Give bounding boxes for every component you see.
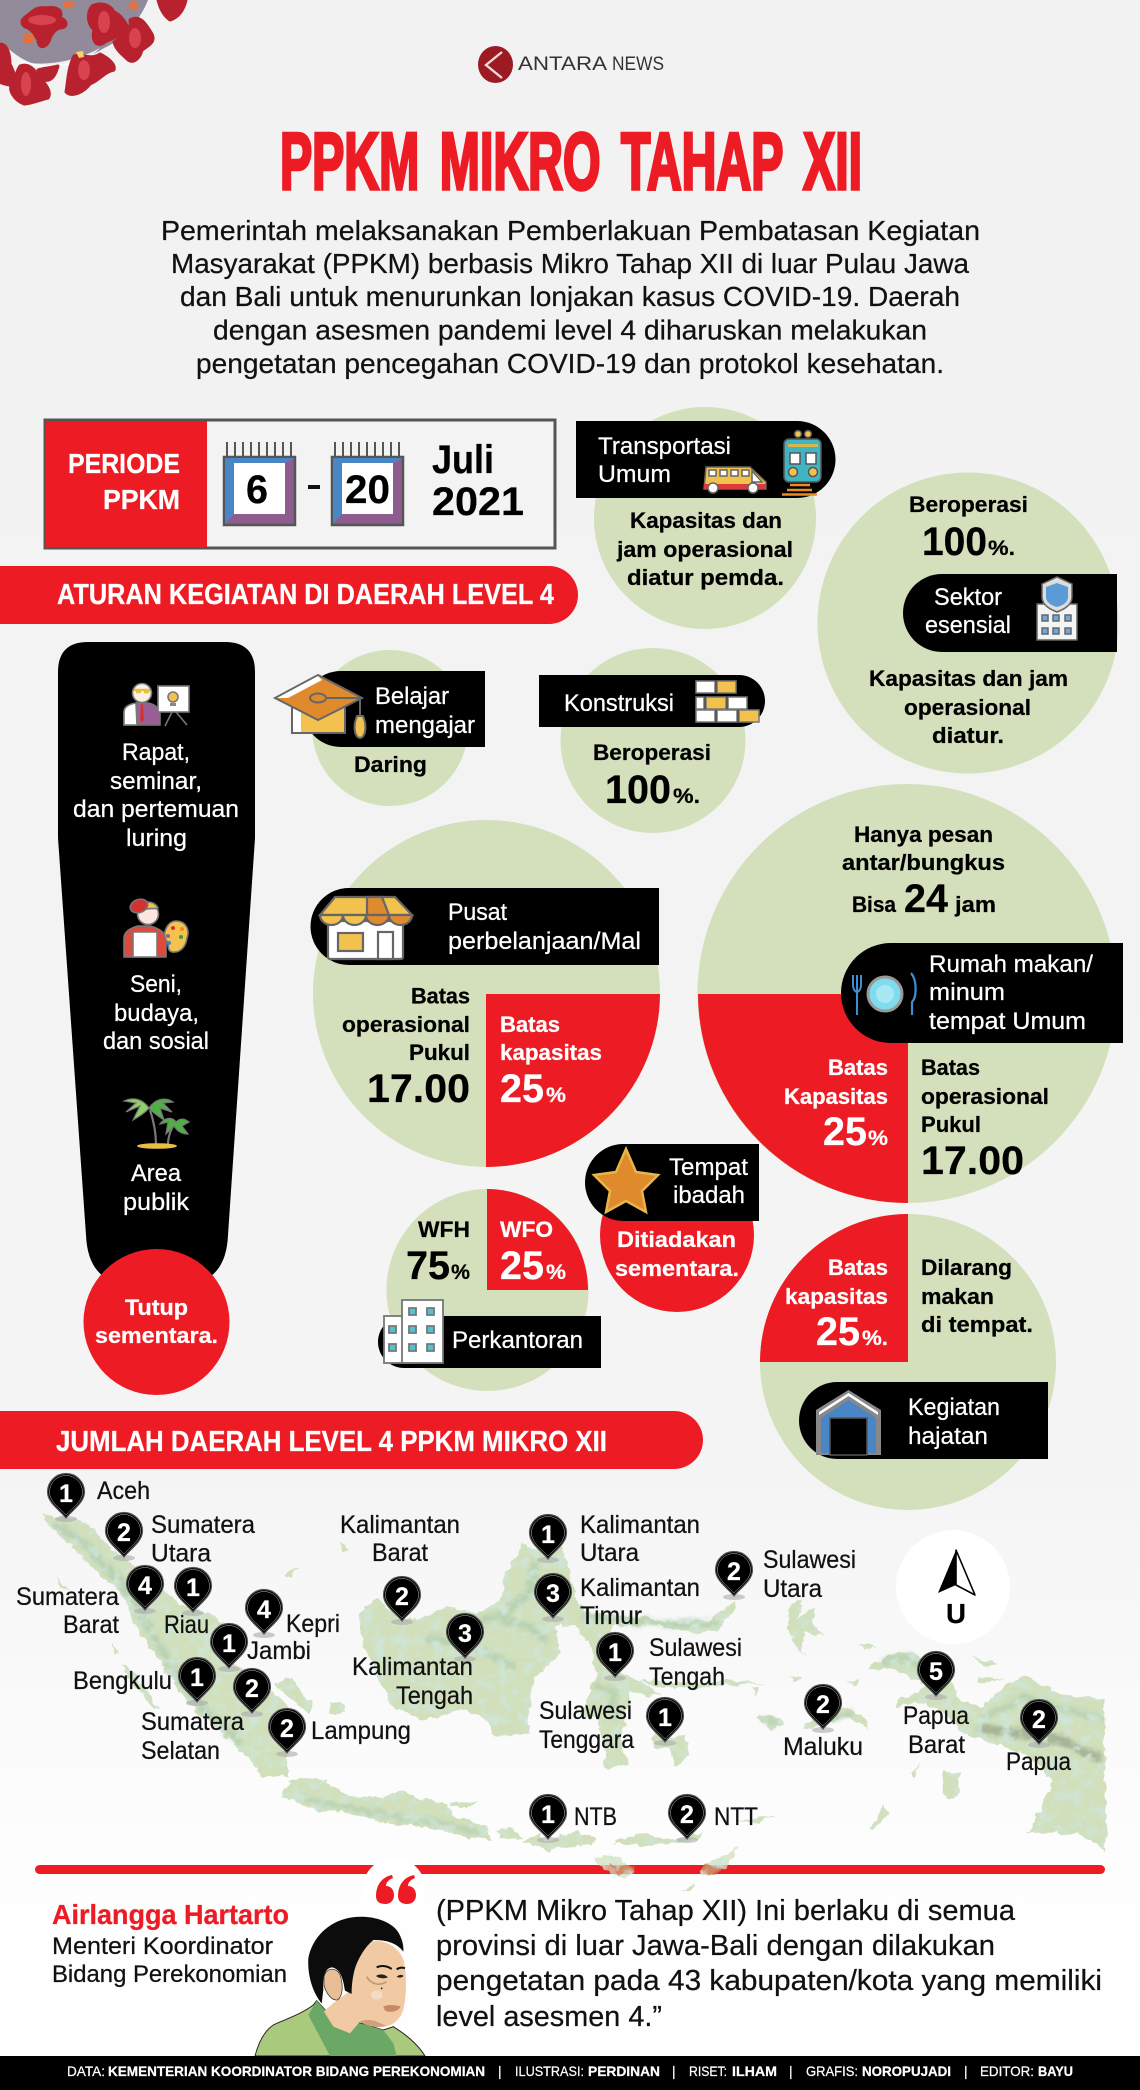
panel: sektor esensial: diatur.	[932, 723, 1004, 748]
footer: |	[789, 2063, 793, 2079]
map: east Indonesia	[560, 1600, 1106, 1892]
panel: rumah makan: 24	[904, 877, 949, 921]
pin: Kalimantan Utara: Kalimantan	[580, 1511, 700, 1539]
pin: Sulawesi Utara: Utara	[763, 1575, 822, 1603]
compass: U	[946, 1598, 966, 1629]
logo: Antara News	[478, 46, 664, 83]
icon: store	[320, 897, 412, 959]
panel: konstruksi: Konstruksi	[564, 690, 674, 717]
pin: Lampung: Lampung	[311, 1717, 411, 1745]
panel: rumah makan: Rumah makan/	[929, 951, 1093, 978]
panel: transportasi umum: diatur pemda.	[627, 565, 784, 590]
panel: pusat perbelanjaan	[310, 820, 660, 1167]
pin: Jambi: 1	[222, 1630, 236, 1658]
panel: pusat perbelanjaan: 25	[500, 1067, 544, 1111]
footer: NOROPUJADI	[862, 2063, 951, 2079]
map: Indonesia	[43, 1515, 1106, 1892]
divider line	[35, 1865, 1105, 1874]
panel: sektor esensial: Beroperasi	[909, 492, 1028, 517]
pin: Sumatera Utara: Sumatera	[151, 1511, 255, 1539]
text: rapat	[73, 739, 239, 852]
pin: NTT	[668, 1794, 758, 1843]
panel: sektor esensial: esensial	[925, 612, 1011, 639]
pin: Kalimantan Barat	[340, 1511, 460, 1625]
panel: belajar mengajar: Belajar	[375, 683, 449, 710]
panel: rumah makan: minum	[929, 979, 1005, 1006]
banner: aturan kegiatan: ATURAN KEGIATAN DI DAERAH LEVEL 4	[57, 579, 554, 611]
icon: house	[816, 1390, 881, 1455]
pin: Riau: 1	[186, 1574, 200, 1602]
panel: tempat ibadah: Tempat	[669, 1154, 748, 1181]
footer: DATA:	[67, 2063, 105, 2079]
pin: Sumatera Selatan: Selatan	[141, 1737, 220, 1765]
pin: Riau: Riau	[164, 1611, 209, 1639]
pin: Maluku: Maluku	[783, 1733, 863, 1761]
speaker name and role: Menteri Koordinator	[52, 1933, 273, 1960]
panel: pusat perbelanjaan: 17.00	[367, 1067, 470, 1111]
panel: kegiatan hajatan: hajatan	[908, 1423, 988, 1450]
panel: kegiatan hajatan: di tempat.	[921, 1312, 1033, 1337]
pin: Kalimantan Timur: 3	[546, 1580, 560, 1608]
pin: Sumatera Utara: 2	[117, 1519, 131, 1547]
pin: Papua Barat: 5	[929, 1658, 943, 1686]
logo: Antara News: ANTARA	[518, 54, 607, 75]
panel: rumah makan: Hanya pesan	[854, 822, 993, 847]
panel: sektor esensial: 100	[922, 520, 987, 564]
pin: Sumatera Barat: Barat	[63, 1611, 119, 1639]
pin: Kalimantan Timur: Timur	[580, 1602, 642, 1630]
panel: belajar mengajar	[275, 650, 485, 806]
panel: belajar mengajar: mengajar	[375, 712, 475, 739]
panel: pusat perbelanjaan: perbelanjaan/Mal	[448, 928, 641, 955]
icon: palm trees	[124, 1099, 189, 1149]
speaker name and role: Bidang Perekonomian	[52, 1961, 287, 1988]
logo: Antara News: NEWS	[612, 54, 664, 75]
footer: |	[964, 2063, 968, 2079]
quote text: (PPKM Mikro Tahap XII) Ini berlaku di semua	[436, 1895, 1016, 1927]
panel: periode PPKM: 2021	[432, 480, 524, 524]
pin: NTT: NTT	[714, 1803, 758, 1831]
pin: Kalimantan Tengah	[352, 1614, 484, 1710]
panel: perkantoran: 75	[406, 1244, 450, 1288]
panel: rumah makan: Pukul	[921, 1112, 981, 1137]
panel: kegiatan hajatan: Kegiatan	[908, 1394, 1000, 1421]
panel: tempat ibadah	[585, 1144, 759, 1312]
quote text: level asesmen 4.”	[436, 2001, 662, 2033]
panel: perkantoran: WFH	[418, 1217, 470, 1242]
panel: rumah makan: 25	[823, 1110, 867, 1154]
panel: rumah makan: Batas	[828, 1055, 888, 1080]
panel: rumah makan	[698, 784, 1123, 1203]
intro text: dan Bali untuk menurunkan lonjakan kasus COVID-19. Daerah	[180, 281, 960, 312]
panel: periode PPKM: PERIODE	[68, 448, 180, 479]
panel: transportasi umum: Umum	[598, 461, 671, 488]
panel: kegiatan tutup sementara: dan sosial	[103, 1028, 209, 1055]
pin: Sumatera Barat: 4	[138, 1572, 152, 1600]
pin: Kalimantan Tengah: Tengah	[396, 1682, 473, 1710]
panel: rumah makan: Bisa	[852, 892, 897, 917]
panel: konstruksi: Beroperasi	[593, 740, 711, 765]
panel: rumah makan: jam	[954, 892, 996, 917]
callout: tutup sementara: sementara.	[95, 1323, 218, 1348]
panel: periode PPKM: PPKM	[103, 484, 180, 515]
footer: ILUSTRASI:	[515, 2063, 584, 2079]
footer: PERDINAN	[588, 2063, 660, 2079]
panel: pusat perbelanjaan: Pukul	[409, 1040, 470, 1065]
pin: Sulawesi Utara: 2	[727, 1558, 741, 1586]
pin: NTB: 1	[541, 1801, 555, 1829]
footer: BAYU	[1038, 2063, 1073, 2079]
pin: Bengkulu: 1	[190, 1664, 204, 1692]
panel: periode PPKM: Juli	[432, 438, 494, 482]
footer: |	[498, 2063, 502, 2079]
footer: EDITOR:	[980, 2063, 1034, 2079]
panel: rumah makan: Batas	[921, 1055, 980, 1080]
pin: Sumatera Barat: Sumatera	[16, 1583, 119, 1611]
callout: tutup sementara	[84, 1249, 230, 1395]
icon: calendar start	[224, 442, 295, 525]
panel: kegiatan tutup sementara: publik	[123, 1189, 190, 1216]
panel: belajar mengajar: Daring	[354, 752, 427, 777]
pin: Kalimantan Barat: Barat	[372, 1539, 428, 1567]
pin: Papua Barat	[903, 1652, 969, 1759]
pin: Maluku: 2	[816, 1691, 830, 1719]
intro text: Masyarakat (PPKM) berbasis Mikro Tahap XII di luar Pulau Jawa	[171, 248, 969, 279]
pin: NTB	[530, 1794, 617, 1843]
footer: GRAFIS:	[806, 2063, 858, 2079]
intro text: Pemerintah melaksanakan Pemberlakuan Pembatasan Kegiatan	[161, 215, 980, 246]
footer: ILHAM	[732, 2063, 777, 2079]
pin: Kalimantan Timur	[534, 1574, 700, 1630]
panel: perkantoran: %	[451, 1261, 470, 1284]
pin: Kalimantan Utara: Utara	[580, 1539, 639, 1567]
pin: Aceh	[48, 1474, 150, 1522]
panel: kegiatan hajatan: 25	[816, 1310, 860, 1354]
panel: konstruksi	[539, 648, 765, 833]
panel: perkantoran: 25	[500, 1244, 544, 1288]
panel: pusat perbelanjaan: Batas	[500, 1012, 560, 1037]
pin: Sumatera Selatan	[141, 1668, 270, 1765]
pin: Papua Barat: Barat	[908, 1731, 965, 1759]
panel: rumah makan: tempat Umum	[929, 1008, 1086, 1035]
icon: presenter	[124, 684, 189, 726]
panel: kegiatan hajatan: Dilarang	[921, 1255, 1012, 1280]
pin: Aceh: Aceh	[97, 1477, 150, 1505]
pin: Sulawesi Tengah: Sulawesi	[649, 1634, 742, 1662]
footer: |	[672, 2063, 676, 2079]
text: rapat: seminar,	[110, 768, 202, 795]
pin: Sulawesi Utara: Sulawesi	[763, 1546, 856, 1574]
pin: Sumatera Barat	[16, 1566, 164, 1639]
pin: Sumatera Selatan: 2	[245, 1675, 259, 1703]
icon: train	[782, 430, 821, 494]
panel: transportasi umum	[576, 407, 835, 629]
panel: konstruksi: 100	[605, 768, 671, 812]
pin: Kalimantan Utara	[530, 1511, 700, 1567]
pin: Kepri: Kepri	[286, 1610, 340, 1638]
quote text	[436, 1895, 1102, 2033]
intro text: pengetatan pencegahan COVID-19 dan protokol kesehatan.	[196, 348, 944, 379]
icon: calendar end	[332, 442, 403, 525]
pin: Jambi: Jambi	[247, 1637, 311, 1665]
illustration: coronavirus	[0, 0, 186, 104]
quote text: pengetatan pada 43 kabupaten/kota yang memiliki	[436, 1965, 1102, 1997]
pin: Sulawesi Tenggara: Tenggara	[539, 1726, 634, 1754]
dash	[308, 485, 320, 489]
footer	[0, 2056, 1140, 2090]
icon: artist	[124, 897, 188, 957]
panel: pusat perbelanjaan: Pusat	[448, 899, 507, 926]
panel: rumah makan: Kapasitas	[784, 1084, 888, 1109]
pin: Papua: 2	[1032, 1706, 1046, 1734]
quote text: provinsi di luar Jawa-Bali dengan dilakukan	[436, 1930, 995, 1962]
footer: KEMENTERIAN KOORDINATOR BIDANG PEREKONOMIAN	[108, 2063, 485, 2079]
text: rapat: Rapat,	[122, 739, 190, 766]
pin: NTB: NTB	[574, 1803, 617, 1831]
panel: kegiatan tutup sementara: Seni,	[130, 971, 182, 998]
panel: kegiatan tutup sementara: budaya,	[114, 1000, 199, 1027]
panel: kegiatan tutup sementara	[58, 642, 255, 1395]
pin: Aceh: 1	[59, 1480, 73, 1508]
panel: sektor esensial	[818, 472, 1118, 774]
pin: Sulawesi Tenggara	[539, 1697, 684, 1754]
icon: plate and cutlery	[853, 973, 916, 1015]
panel: pusat perbelanjaan: operasional	[342, 1012, 470, 1037]
pin: Kalimantan Tengah: 3	[458, 1620, 472, 1648]
pin: Kepri: 4	[257, 1596, 271, 1624]
panel: konstruksi: %.	[673, 785, 700, 808]
pin: Bengkulu: Bengkulu	[73, 1667, 172, 1695]
pin: Kalimantan Barat: 2	[395, 1583, 409, 1611]
banner: jumlah daerah	[0, 1411, 703, 1469]
icon: shield building	[1037, 577, 1077, 640]
pin: Sulawesi Tenggara: 1	[658, 1704, 672, 1732]
icon: calendar start: 6	[246, 468, 268, 512]
pin: Bengkulu	[73, 1658, 216, 1706]
text: rapat: dan pertemuan	[73, 796, 239, 823]
pin: Kalimantan Utara: 1	[541, 1521, 555, 1549]
panel: pusat perbelanjaan: Batas	[411, 984, 470, 1008]
banner: aturan kegiatan	[0, 566, 578, 624]
icon: bus	[704, 467, 766, 493]
panel: tempat ibadah: Ditiadakan	[617, 1227, 736, 1252]
pin: NTT: 2	[680, 1801, 694, 1829]
pin: Kalimantan Tengah: Kalimantan	[352, 1653, 473, 1681]
panel: rumah makan: 17.00	[921, 1139, 1024, 1183]
pin: Sumatera Utara	[106, 1511, 255, 1568]
pin: Lampung: 2	[280, 1715, 294, 1743]
pin: Riau	[164, 1568, 212, 1639]
panel: perkantoran: WFO	[500, 1217, 553, 1242]
compass	[896, 1530, 1010, 1644]
pin: Sumatera Selatan: Sumatera	[141, 1708, 244, 1736]
panel: kegiatan hajatan: kapasitas	[785, 1284, 888, 1309]
panel: sektor esensial: %.	[988, 537, 1015, 560]
icon: graduation cap	[275, 675, 365, 738]
speaker name and role	[52, 1899, 289, 1988]
panel: rumah makan: antar/bungkus	[842, 850, 1005, 875]
panel: kegiatan hajatan: %.	[862, 1327, 888, 1350]
panel: perkantoran: %	[546, 1261, 566, 1284]
panel: perkantoran	[378, 1189, 601, 1391]
map labels and pins	[16, 1474, 1071, 1843]
panel: transportasi umum: jam operasional	[616, 537, 793, 562]
pin: Sulawesi Utara	[716, 1546, 856, 1603]
pin: Papua	[1006, 1700, 1071, 1776]
panel: perkantoran: Perkantoran	[452, 1327, 583, 1354]
intro text	[161, 215, 980, 379]
pin: Sulawesi Tengah: 1	[608, 1639, 622, 1667]
panel: kegiatan tutup sementara: Area	[131, 1160, 182, 1187]
pin: Sulawesi Tengah	[596, 1632, 742, 1691]
pin: Kepri	[246, 1590, 340, 1638]
footer: RISET:	[689, 2063, 727, 2079]
panel: transportasi umum: Kapasitas dan	[630, 508, 782, 533]
panel: transportasi umum: Transportasi	[598, 433, 731, 460]
panel: tempat ibadah: ibadah	[673, 1182, 745, 1209]
map: west Indonesia	[43, 1515, 591, 1851]
pin: Sulawesi Tengah: Tengah	[649, 1663, 725, 1691]
pin: Maluku	[783, 1684, 863, 1761]
callout: tutup sementara: Tutup	[125, 1295, 188, 1320]
panel: kegiatan hajatan: makan	[921, 1284, 994, 1309]
pin: Lampung	[268, 1708, 411, 1757]
panel: periode PPKM	[45, 420, 555, 548]
speaker name and role: Airlangga Hartarto	[52, 1899, 289, 1930]
illustration: portrait	[255, 1917, 425, 2056]
pin: Papua: Papua	[1006, 1748, 1071, 1776]
pin: Kalimantan Timur: Kalimantan	[580, 1574, 700, 1602]
panel: sektor esensial: Sektor	[934, 584, 1002, 611]
panel: sektor esensial: operasional	[904, 695, 1031, 720]
icon: calendar end: 20	[345, 468, 390, 512]
pin: Sumatera Utara: Utara	[151, 1540, 211, 1568]
icon: quotation mark	[363, 1858, 425, 1918]
pin: Kalimantan Barat: Kalimantan	[340, 1511, 460, 1539]
panel: kegiatan hajatan	[760, 1214, 1056, 1510]
panel: sektor esensial: Kapasitas dan jam	[869, 666, 1068, 691]
pin: Sulawesi Tenggara: Sulawesi	[539, 1697, 632, 1725]
text: rapat: luring	[126, 825, 187, 852]
icon: bricks	[696, 681, 759, 722]
pin: Jambi	[210, 1624, 311, 1672]
panel: kegiatan hajatan: Batas	[828, 1255, 888, 1280]
panel: pusat perbelanjaan: %	[546, 1084, 566, 1107]
panel: rumah makan: operasional	[921, 1084, 1049, 1109]
icon: office building	[384, 1300, 443, 1363]
intro text: dengan asesmen pandemi level 4 diharuskan melakukan	[213, 314, 927, 346]
panel: tempat ibadah: sementara.	[615, 1256, 739, 1281]
banner: jumlah daerah: JUMLAH DAERAH LEVEL 4 PPKM MIKRO XII	[56, 1426, 607, 1458]
pin: Papua Barat: Papua	[903, 1702, 969, 1730]
panel: pusat perbelanjaan: kapasitas	[500, 1040, 602, 1065]
panel: rumah makan: %	[868, 1127, 888, 1150]
icon: star	[594, 1149, 658, 1212]
